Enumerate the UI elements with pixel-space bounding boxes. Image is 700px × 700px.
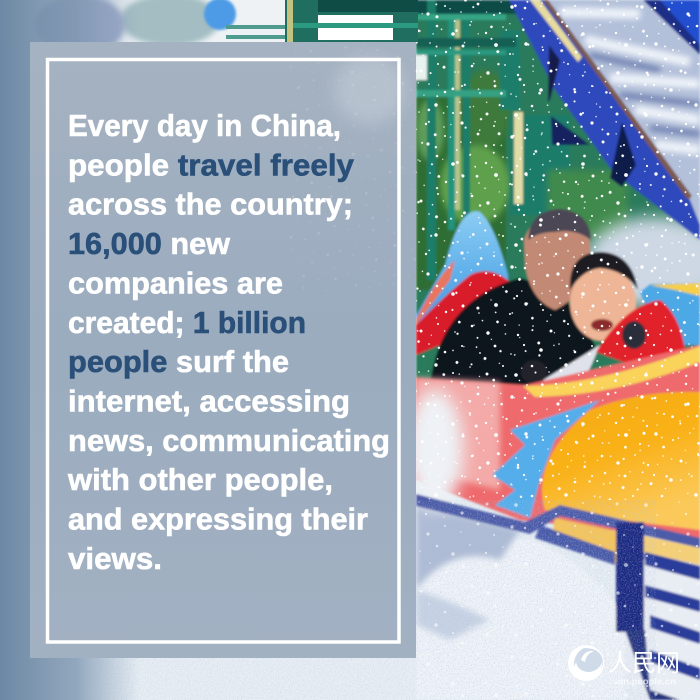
photo: dragon boat crest bbox=[416, 211, 510, 355]
logo wordmark: 人民网 bbox=[608, 650, 680, 677]
body text: views. bbox=[68, 541, 162, 576]
body text: and expressing their bbox=[68, 502, 368, 537]
body text: 16,000 new bbox=[68, 226, 231, 261]
panel: faint spray specks bbox=[290, 42, 416, 292]
photo: blue railing bbox=[416, 494, 700, 700]
body text: across the country; bbox=[68, 187, 353, 222]
photo: bottom foam grain bbox=[90, 658, 416, 700]
icon: logo swirl bbox=[568, 645, 604, 681]
body text: companies are bbox=[68, 265, 283, 300]
body text: internet, accessing bbox=[68, 384, 350, 418]
photo: man bbox=[430, 209, 595, 392]
body text: people travel freely bbox=[68, 147, 354, 182]
body text: created; 1 billion bbox=[68, 305, 306, 340]
photo: spray behind riders bbox=[585, 217, 700, 307]
left slate fade bbox=[0, 0, 140, 700]
body text: with other people, bbox=[67, 462, 333, 497]
photo: foam texture bbox=[416, 500, 656, 700]
photo: blue slide and water chute bbox=[509, 0, 700, 240]
photo: foam wave bbox=[407, 390, 700, 700]
logo: People's Daily Online bbox=[568, 645, 680, 688]
body text: Every day in China, bbox=[68, 108, 341, 143]
panel: white frame bbox=[48, 60, 399, 642]
body text: news, communicating bbox=[68, 423, 390, 458]
logo url: en.people.cn bbox=[618, 676, 676, 688]
photo: dragon head bbox=[596, 283, 700, 368]
photo: boy bbox=[521, 252, 638, 384]
photo: scene painted with soft focus bbox=[407, 0, 700, 700]
photo: dragon boat body bbox=[416, 345, 700, 540]
photo: water droplets bbox=[416, 0, 700, 700]
photo: green structure and foliage bbox=[416, 0, 700, 400]
body text bbox=[67, 108, 390, 576]
body text: people surf the bbox=[68, 344, 289, 379]
panel: translucent text panel bbox=[30, 42, 416, 658]
panel highlight at upper right bbox=[334, 56, 406, 124]
photo: top strip beyond the panel bbox=[0, 0, 418, 55]
